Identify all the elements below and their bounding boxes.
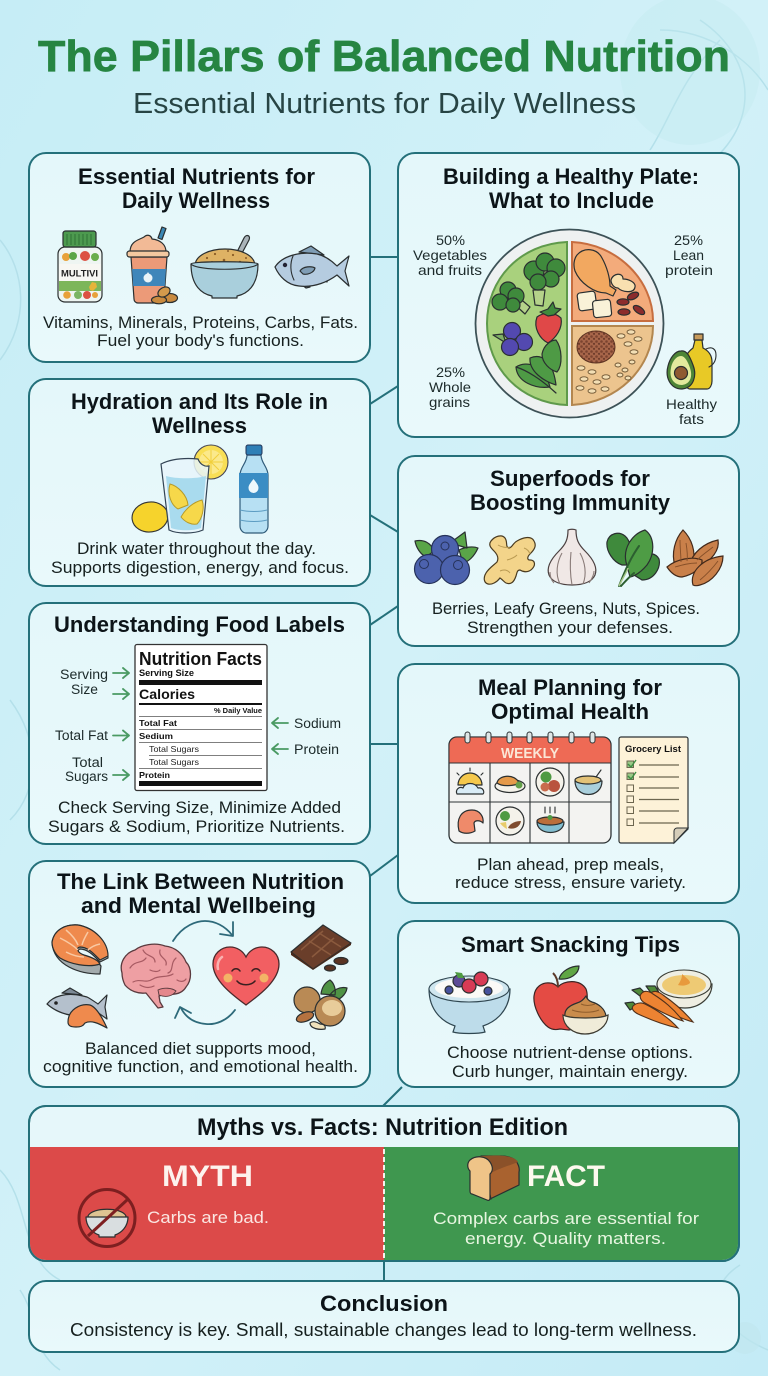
plate labels: fats <box>679 411 704 427</box>
text: hydration description <box>51 540 349 577</box>
nutrition facts label: Total Sugars <box>149 744 199 754</box>
panel: food labels <box>29 603 370 844</box>
icon: smiling heart <box>213 947 279 1005</box>
title: The Pillars of Balanced Nutrition <box>38 32 730 81</box>
icon: garlic <box>548 529 596 585</box>
text: nutrients description: Fuel your body's functions. <box>97 332 304 350</box>
fact side <box>384 1147 738 1260</box>
text: mental wellbeing description: cognitive function, and emotional health. <box>43 1058 358 1076</box>
connector lines <box>370 257 402 1281</box>
subtitle: Essential Nutrients for Daily Wellness <box>133 88 636 120</box>
heading: healthy plate: What to Include <box>489 188 654 213</box>
heading: mental wellbeing: and Mental Wellbeing <box>81 893 316 918</box>
plate labels: grains <box>429 394 470 410</box>
plate labels: 25% <box>436 364 465 380</box>
icon: crossed-out bowl <box>79 1190 135 1246</box>
panel: myths vs facts <box>29 1106 739 1261</box>
text: superfoods description: Berries, Leafy Greens, Nuts, Spices. <box>432 600 700 618</box>
icon: nuts <box>294 980 347 1029</box>
plate labels: 50% <box>436 232 465 248</box>
heading: hydration: Hydration and Its Role in <box>71 389 328 414</box>
heading: food labels: Understanding Food Labels <box>54 612 345 637</box>
text: conclusion: Consistency is key. Small, sustainable changes lead to long-term wellness. <box>70 1320 697 1340</box>
heading: essential nutrients: Essential Nutrients for <box>78 164 315 189</box>
nutrition facts label: Nutrition Facts <box>139 649 262 669</box>
plate labels: Whole <box>429 379 471 395</box>
heading: myths vs facts: Myths vs. Facts: Nutrition Edition <box>197 1114 568 1141</box>
nutrition facts label: Serving Size <box>139 668 194 678</box>
plate labels: 25% <box>674 232 703 248</box>
plate labels: and fruits <box>418 262 482 278</box>
nutrition facts label: Total Fat <box>139 718 177 728</box>
text: food labels description: Sugars & Sodium, Prioritize Nutrients. <box>48 818 345 836</box>
panel: smart snacking <box>398 921 739 1087</box>
panel: mental wellbeing <box>29 861 370 1087</box>
nutrition facts label: % Daily Value <box>214 706 262 715</box>
nutrition facts label <box>135 644 267 790</box>
panel: conclusion <box>29 1281 739 1352</box>
icon: weekly calendar <box>449 732 611 843</box>
text: myth: Carbs are bad. <box>147 1208 269 1227</box>
panel: meal planning <box>398 664 739 903</box>
heading: essential nutrients <box>78 164 315 213</box>
whole grains quarter <box>572 326 653 405</box>
text: superfoods description: Strengthen your defenses. <box>467 619 673 637</box>
plate labels: protein <box>665 262 713 278</box>
heading: smart snacking: Smart Snacking Tips <box>461 932 680 957</box>
icon: multivitamin bottle <box>58 231 102 302</box>
heading: meal planning <box>478 675 662 724</box>
icon: fish <box>275 246 349 288</box>
heading: hydration <box>71 389 328 438</box>
plate labels <box>413 232 717 427</box>
icon: carrots and dip <box>625 970 712 1028</box>
text: snacking description: Curb hunger, maintain energy. <box>452 1063 688 1081</box>
icon: brain <box>121 944 190 1008</box>
text: mental wellbeing description: Balanced diet supports mood, <box>85 1040 316 1058</box>
heading: fact: FACT <box>527 1160 605 1193</box>
vegetables half <box>487 242 567 405</box>
callout labels: Sodium <box>294 716 341 731</box>
icon: lemon water glass <box>130 445 228 534</box>
panel: superfoods <box>398 456 739 646</box>
icon: water bottle <box>239 445 268 533</box>
text: meal planning description: Plan ahead, prep meals, <box>477 856 664 874</box>
icon: salmon steak <box>52 925 108 974</box>
icon: grain bowl <box>191 236 258 298</box>
plate labels: Healthy <box>666 396 717 412</box>
plate labels: Vegetables <box>413 247 487 263</box>
text: food labels description: Check Serving Size, Minimize Added <box>58 799 341 817</box>
icon: bread loaf <box>468 1156 519 1200</box>
text: superfoods description <box>432 600 700 637</box>
lean protein quarter <box>572 242 653 321</box>
text: snacking description <box>447 1044 693 1081</box>
arrows: brain-heart loop <box>173 921 235 1024</box>
icon: weekly calendar: WEEKLY <box>501 746 559 762</box>
text: fact: energy. Quality matters. <box>465 1229 666 1248</box>
text: hydration description: Supports digestion, energy, and focus. <box>51 559 349 577</box>
text: nutrients description <box>43 314 358 350</box>
nutrition facts label: Total Sugars <box>149 757 199 767</box>
meal icons <box>456 768 602 835</box>
heading: healthy plate <box>443 164 699 213</box>
callout labels: Total Fat <box>55 728 108 743</box>
icon: yogurt bowl <box>429 972 510 1034</box>
icon: avocado and oil <box>667 334 716 389</box>
heading: meal planning: Optimal Health <box>491 699 649 724</box>
myth side <box>30 1147 384 1260</box>
heading: essential nutrients: Daily Wellness <box>122 188 270 213</box>
icon: protein shake <box>127 227 178 304</box>
icon: grocery list: Grocery List <box>625 744 682 755</box>
heading: myth: MYTH <box>162 1160 253 1193</box>
heading: healthy plate: Building a Healthy Plate: <box>443 164 699 189</box>
heading: superfoods <box>470 466 670 515</box>
text: hydration description: Drink water throughout the day. <box>77 540 316 558</box>
callout labels: Serving <box>60 667 108 682</box>
text: meal planning description <box>455 856 686 892</box>
heading: hydration: Wellness <box>152 413 247 438</box>
callout labels: Size <box>71 682 98 697</box>
nutrition facts label: Calories <box>139 687 195 702</box>
text: fact: Complex carbs are essential for <box>433 1209 699 1228</box>
panel: healthy plate <box>398 153 739 437</box>
text: fact <box>433 1209 699 1248</box>
nutrition facts label: Protein <box>139 770 170 780</box>
callout labels: Sugars <box>65 769 108 784</box>
icon: apple and peanut butter <box>534 966 608 1034</box>
nutrition facts label: Sedium <box>139 731 173 741</box>
text: meal planning description: reduce stress, ensure variety. <box>455 874 686 892</box>
panel: hydration <box>29 379 370 586</box>
callout labels: Protein <box>294 742 339 757</box>
icon: almonds <box>667 530 723 586</box>
text: mental wellbeing description <box>43 1040 358 1076</box>
plate chart <box>476 230 664 418</box>
label arrows <box>113 668 288 780</box>
icon: fish with salmon <box>47 988 107 1028</box>
heading: meal planning: Meal Planning for <box>478 675 662 700</box>
heading: conclusion: Conclusion <box>320 1291 448 1316</box>
callout labels: Total <box>72 755 103 770</box>
heading: superfoods: Superfoods for <box>490 466 650 491</box>
icon: ginger <box>484 536 535 584</box>
plate labels: Lean <box>673 247 704 263</box>
heading: mental wellbeing: The Link Between Nutrition <box>57 869 344 894</box>
text: food labels description <box>48 799 345 836</box>
heading: mental wellbeing <box>57 869 344 918</box>
icon: spinach <box>607 530 659 586</box>
text: snacking description: Choose nutrient-dense options. <box>447 1044 693 1062</box>
callout labels <box>55 667 341 784</box>
text: nutrients description: Vitamins, Minerals, Proteins, Carbs, Fats. <box>43 314 358 332</box>
heading: superfoods: Boosting Immunity <box>470 490 670 515</box>
icon: multivitamin bottle: MULTIVI <box>61 268 98 278</box>
icon: blueberries <box>414 532 478 584</box>
panel: essential nutrients <box>29 153 370 362</box>
icon: grocery list <box>619 737 688 843</box>
icon: chocolate <box>291 925 351 971</box>
